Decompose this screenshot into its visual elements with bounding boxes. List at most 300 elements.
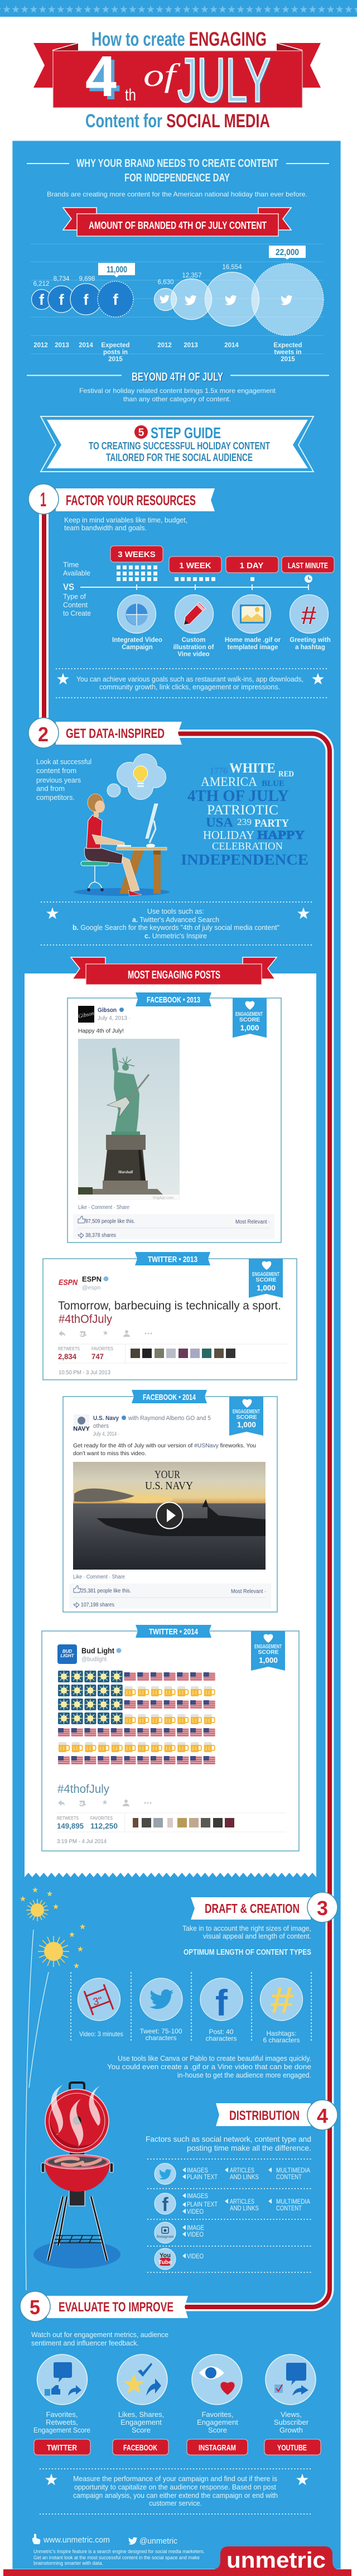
footer red band and unmetric logo: unmetric <box>226 2548 326 2573</box>
tweet stats: 149,895 <box>57 1821 84 1830</box>
title 4th of july lettering: JULY <box>177 45 271 115</box>
badge: engagement score <box>249 1259 283 1298</box>
facebook 2015 expected bubble <box>98 281 133 317</box>
facebook 2012 bubble: f <box>39 291 45 308</box>
step 5 header: 5 <box>30 2296 40 2319</box>
optimal length columns: characters <box>205 2035 237 2042</box>
post card: facebook 2014 us navy: Get ready for the 4th of July with our version of #USNavy fireworks. You <box>73 1442 256 1449</box>
metric column: facebook <box>113 2354 168 2455</box>
button: facebook <box>113 2439 168 2455</box>
5 step guide banner: TO CREATING SUCCESSFUL HOLIDAY CONTENT <box>89 440 270 452</box>
tweet stats: 10:50 PM - 3 Jul 2013 <box>59 1369 110 1376</box>
badge: engagement score: ENGAGEMENT <box>252 1271 279 1278</box>
heading: why your brand: WHY YOUR BRAND NEEDS TO CREATE CONTENT <box>76 157 278 170</box>
word cloud: RED <box>278 770 294 779</box>
twitter bubble chart: 2013 <box>184 342 198 349</box>
tools text: You could even create a .gif or a Vine video that can be done <box>107 2063 311 2071</box>
distribution row: facebook: MULTIMEDIA <box>276 2198 310 2205</box>
metric column: twitter: Retweets, <box>46 2418 78 2426</box>
step 1 header <box>28 484 215 514</box>
distribution row: youtube: You <box>160 2252 171 2259</box>
word cloud: USA <box>206 816 233 829</box>
tweet stats: FAVORITES <box>90 1815 113 1821</box>
button: 3 weeks <box>110 546 163 562</box>
post card: twitter 2013 espn: Tomorrow, barbecuing is technically a sport. <box>58 1299 281 1312</box>
distribution row: instagram: VIDEO <box>187 2230 204 2238</box>
label: facebook 2013: FACEBOOK • 2013 <box>147 995 200 1005</box>
title ribbon <box>33 43 321 108</box>
beyond text <box>79 387 276 403</box>
metric column: youtube: Growth <box>279 2426 303 2434</box>
post card: facebook 2014 us navy: with Raymond Alberto GO and 5 <box>128 1415 211 1422</box>
step 1 tip: community growth, link clicks, engagement or impressions. <box>99 683 280 691</box>
post card: twitter 2014 bud light: #4thofJuly <box>57 1783 109 1796</box>
post card: facebook 2014 us navy <box>63 1390 277 1612</box>
calendar squares: 1 week <box>175 577 215 581</box>
title block <box>33 28 321 132</box>
distribution row: twitter <box>155 2164 310 2185</box>
content type: integrated video campaign: Campaign <box>122 644 153 651</box>
beyond text: than any other category of content. <box>123 395 231 403</box>
axis labels: VS <box>63 582 74 592</box>
beyond text: Festival or holiday related content brings 1.5x more engagement <box>79 387 276 395</box>
distribution row: instagram: Instagram <box>156 2234 174 2239</box>
step 2 header <box>28 718 182 748</box>
tweet stats: 2,834 <box>58 1352 76 1361</box>
distribution row: twitter: MULTIMEDIA <box>276 2166 310 2174</box>
icon: hashtag: # <box>270 1979 294 2021</box>
gibson logo <box>78 1006 95 1023</box>
person <box>84 794 142 896</box>
metric column: youtube: Views, <box>281 2410 302 2419</box>
step 1 intro text: Keep in mind variables like time, budget, <box>64 516 187 524</box>
distribution row: twitter: IMAGES <box>187 2166 208 2174</box>
badge: engagement score: ENGAGEMENT <box>254 1643 282 1650</box>
badge: engagement score: SCORE <box>255 1277 277 1283</box>
distribution row: youtube: VIDEO <box>187 2252 204 2260</box>
tools text <box>107 2055 311 2079</box>
facebook 2013 bubble <box>48 286 75 313</box>
step 4 header <box>216 2100 337 2130</box>
post card: twitter 2014 bud light: @budlight <box>81 1656 107 1663</box>
step 4 text: posting time make all the difference. <box>187 2143 311 2152</box>
content type: gif or image <box>225 595 281 651</box>
step 2 text: and from <box>36 784 65 793</box>
distribution row: facebook: f <box>162 2194 168 2215</box>
optimal length columns: Hashtags: <box>266 2030 297 2037</box>
calendar squares: 3 weeks <box>117 565 157 581</box>
bud light logo: BUD <box>62 1649 72 1654</box>
button: last minute <box>282 557 334 573</box>
content type: custom illustration: Vine video <box>177 651 210 658</box>
button: 1 week <box>169 557 221 573</box>
step 5 text: sentiment and influencer feedback. <box>31 2339 139 2347</box>
step 4 text: Factors such as social network, content type and <box>146 2134 311 2143</box>
ribbon: amount of branded content: AMOUNT OF BRANDED 4TH OF JULY CONTENT <box>89 220 267 231</box>
button: youtube <box>264 2439 321 2455</box>
badge: engagement score: 1,000 <box>240 1024 259 1032</box>
post card: twitter 2013 espn <box>43 1252 297 1380</box>
facebook 2012 bubble <box>31 289 51 309</box>
desk <box>117 847 167 894</box>
facebook stats: 87,509 people like this. <box>85 1219 135 1225</box>
espn logo: ESPN <box>59 1278 78 1287</box>
closing tip: opportunity to capitalize on the audience response. Based on post <box>74 2483 276 2491</box>
step 1 intro text: team bandwidth and goals. <box>64 524 147 532</box>
facebook bubble chart: 6,212 <box>33 281 49 287</box>
step 1 header: FACTOR YOUR RESOURCES <box>66 493 196 509</box>
photo: statue of liberty with guitar: Marshall <box>118 1170 133 1174</box>
post card: twitter 2013 espn: @espn <box>82 1284 101 1291</box>
video: us navy carrier at sunset: U.S. NAVY <box>145 1480 193 1492</box>
icon: film reel <box>126 603 148 626</box>
facebook stats: 38,378 shares <box>85 1232 116 1239</box>
content type: greeting with hashtag: a hashtag <box>295 644 325 651</box>
tools text: Use tools like Canva or Pablo to create beautiful images quickly. <box>118 2055 311 2062</box>
label expected tweets: tweets in <box>274 349 302 356</box>
icon: pencil <box>184 602 205 625</box>
smoke <box>51 2085 100 2148</box>
axis labels: Available <box>63 569 90 577</box>
distribution row: facebook: ARTICLES <box>230 2198 254 2205</box>
icon: speech bubble, check and share <box>274 2363 308 2396</box>
video: us navy carrier at sunset: YOUR <box>155 1469 181 1481</box>
footer description: Unmetric's Inspire feature is a search engine designed for social media marketers. <box>33 2549 205 2555</box>
word cloud: WHITE <box>229 761 276 776</box>
photo: statue of liberty with guitar: ImgApr.com <box>153 1196 174 1200</box>
button: instagram <box>187 2439 248 2455</box>
5 step guide banner: 5 <box>138 427 144 439</box>
closing tip: customer service. <box>149 2499 202 2507</box>
button: facebook: FACEBOOK <box>123 2443 157 2453</box>
label: twitter 2014 <box>136 1625 211 1638</box>
video: us navy carrier at sunset <box>73 1462 266 1570</box>
word cloud: CELEBRATION <box>212 841 283 852</box>
footer links: @unmetric <box>139 2536 177 2546</box>
post card: twitter 2013 espn: #4thOfJuly <box>59 1313 112 1326</box>
word cloud: PATRIOTIC <box>207 803 278 818</box>
tweet action icons <box>59 1330 152 1337</box>
distribution row: facebook: IMAGES <box>187 2192 208 2200</box>
optimal length columns: Tweet: 75-100 <box>139 2027 182 2035</box>
facebook stats <box>69 1584 271 1609</box>
step 4 text <box>146 2134 311 2152</box>
button: instagram: INSTAGRAM <box>199 2443 236 2453</box>
axis labels: Type of <box>63 592 86 601</box>
word cloud: HOLIDAY <box>203 828 254 842</box>
twitter 2014 bubble <box>205 272 259 326</box>
metric column: instagram: Favorites, <box>201 2410 234 2419</box>
navy logo: NAVY <box>73 1426 90 1432</box>
button: twitter <box>34 2439 90 2455</box>
content type: integrated video campaign: Integrated Video <box>112 637 162 644</box>
step 2 text <box>36 757 91 802</box>
content type: custom illustration <box>173 595 214 658</box>
grill legs <box>48 2196 107 2261</box>
icon: picture <box>240 605 265 623</box>
post card: facebook 2014 us navy: don't want to miss this video. <box>73 1450 146 1457</box>
facebook 2014 bubble <box>70 284 102 315</box>
content type: custom illustration: illustration of <box>173 644 214 651</box>
step 4 header: DISTRIBUTION <box>229 2108 300 2123</box>
post card: facebook 2013 gibson <box>67 992 281 1243</box>
step 2 header: 2 <box>38 723 49 746</box>
calendar square: 1 day <box>250 577 254 581</box>
facebook stats <box>73 1214 274 1239</box>
distribution row: youtube <box>155 2248 204 2270</box>
monitor <box>117 804 158 847</box>
step 1 tip: You can achieve various goals such as restaurant walk-ins, app downloads, <box>76 675 303 683</box>
title 4th of july lettering: 4 <box>85 44 117 108</box>
tweet stats: 112,250 <box>90 1821 118 1830</box>
twitter bubble chart: 16,554 <box>222 264 242 271</box>
closing tip: Measure the performance of your campaign and find out if there is <box>73 2474 277 2483</box>
icon: hashtag <box>260 1978 302 2021</box>
axis labels <box>63 560 91 617</box>
badge: engagement score: SCORE <box>236 1414 257 1421</box>
grill bowl <box>41 2152 113 2191</box>
tools tip: c. Unmetric's Inspire <box>144 932 207 940</box>
step 1 tip <box>56 669 327 698</box>
step 5 text <box>31 2330 168 2347</box>
title 4th of july lettering: of <box>143 57 181 93</box>
button: 1 week: 1 WEEK <box>179 561 211 570</box>
step 3 text <box>182 1925 311 1957</box>
distribution row: facebook <box>155 2192 310 2215</box>
icon: check, star and share <box>123 2363 161 2396</box>
facebook bubble chart: 2012 <box>33 342 48 349</box>
step 2 text: Look at successful <box>36 757 91 766</box>
optimal length columns: Video: 3 minutes <box>79 2030 123 2038</box>
step 4 header: 4 <box>317 2104 328 2127</box>
content type: integrated video campaign <box>112 595 162 651</box>
badge: engagement score: SCORE <box>239 1016 260 1023</box>
label: facebook 2014 <box>132 1390 207 1403</box>
optimal length columns: characters <box>145 2034 177 2042</box>
facebook 2014 bubble: f <box>84 291 89 308</box>
content type: custom illustration: Custom <box>182 637 205 644</box>
facebook stats: Most Relevant · <box>231 1589 266 1595</box>
title line: how to create engaging: How to create ENGAGING <box>91 28 267 50</box>
heading: beyond 4th of july: BEYOND 4TH OF JULY <box>132 371 224 384</box>
twitter bubble chart: 6,630 <box>158 279 173 286</box>
button: last minute: LAST MINUTE <box>288 561 328 570</box>
tweet stats: RETWEETS <box>58 1346 80 1351</box>
metric column: facebook: Likes, Shares, <box>118 2410 164 2419</box>
footer red band and unmetric logo <box>3 2546 351 2576</box>
icon: speech bubble, thumb and share <box>45 2362 81 2396</box>
content type: greeting with hashtag: Greeting with <box>290 637 331 644</box>
step 2 header: GET DATA-INSPIRED <box>66 726 165 741</box>
step 5 header <box>20 2291 188 2321</box>
button: youtube: YOUTUBE <box>277 2443 307 2453</box>
content type: gif or image: Home made .gif or <box>225 637 281 644</box>
word cloud <box>181 761 308 868</box>
distribution row: twitter: ARTICLES <box>230 2166 254 2174</box>
label: twitter 2013 <box>135 1252 210 1265</box>
icon: facebook <box>200 1978 243 2023</box>
facebook bubble chart: 2013 <box>55 342 69 349</box>
metric column: youtube: Subscriber <box>274 2418 309 2426</box>
facebook bubble chart: 9,698 <box>79 276 95 282</box>
content type: greeting with hashtag <box>290 595 331 651</box>
heading: beyond 4th of july <box>27 371 329 384</box>
ribbon: most engaging posts <box>71 957 277 985</box>
top star band <box>0 0 357 17</box>
tools tip <box>41 902 312 945</box>
footer description: Get an instant look at the most successful content in the social space and make <box>33 2555 200 2561</box>
step 2 text: previous years <box>36 776 81 784</box>
facebook 2013 bubble: f <box>59 291 65 308</box>
metric column: twitter: Engagement Score <box>33 2426 90 2434</box>
title 4th of july lettering <box>85 44 272 116</box>
metric column: instagram <box>187 2354 248 2455</box>
word cloud: 4TH OF JULY <box>187 788 289 805</box>
metric column: twitter: Favorites, <box>46 2410 78 2419</box>
tweet stats <box>57 1813 286 1845</box>
icon: pointing hand <box>32 2534 40 2544</box>
ribbon: amount of branded content <box>63 208 291 236</box>
closing tip <box>40 2469 311 2514</box>
label expected posts: posts in <box>103 349 128 356</box>
callout 11,000: 11,000 <box>107 265 127 275</box>
icon: video clapper <box>78 1978 120 2021</box>
icon: clock <box>305 575 312 583</box>
twitter 2015 expected bubble <box>252 263 324 335</box>
chart grid lines <box>31 244 324 354</box>
badge: engagement score <box>233 998 267 1038</box>
illustration: person at desk with idea <box>74 754 170 896</box>
word cloud: HAPPY <box>257 828 305 842</box>
content type: gif or image: templated image <box>228 644 278 651</box>
button: twitter: TWITTER <box>47 2443 77 2453</box>
label expected tweets: 2015 <box>281 356 295 363</box>
optimal length columns <box>71 1972 311 2044</box>
post card: twitter 2014 bud light <box>42 1625 299 1851</box>
tweet stats: RETWEETS <box>57 1815 79 1821</box>
tweet stats <box>58 1344 287 1376</box>
label: twitter 2014: TWITTER • 2014 <box>149 1627 199 1637</box>
closing tip: campaign analysis, you can either extend the campaign or end with <box>73 2491 278 2500</box>
optimal length columns: Post: 40 <box>209 2028 234 2036</box>
stripe from step 1 to step 2 <box>39 514 49 718</box>
label expected posts: 2015 <box>108 356 123 363</box>
metric column: facebook: Engagement <box>120 2418 162 2426</box>
thought cloud <box>107 754 166 799</box>
5 step guide banner: TAILORED FOR THE SOCIAL AUDIENCE <box>106 452 253 464</box>
icon: light bulb <box>133 766 148 787</box>
badge: engagement score: 1,000 <box>237 1421 256 1429</box>
stripe from step 2 to step 5 <box>178 733 330 2307</box>
label: twitter 2013: TWITTER • 2013 <box>148 1255 197 1264</box>
grill lid <box>45 2083 109 2153</box>
navy logo <box>73 1414 90 1432</box>
sparkler fireworks <box>20 1887 85 2290</box>
post card: twitter 2013 espn: ESPN <box>82 1275 102 1283</box>
video play button <box>156 1503 183 1528</box>
tools tip: b. Google Search for the keywords "4th of july social media content" <box>73 924 279 932</box>
stool <box>81 861 109 891</box>
post card: facebook 2014 us navy: July 4, 2014 · <box>93 1431 119 1437</box>
white card: most engaging posts <box>25 973 316 1877</box>
distribution row: twitter: AND LINKS <box>230 2173 259 2181</box>
heading: why your brand <box>27 157 329 184</box>
callout 22,000: 22,000 <box>276 248 299 257</box>
badge: engagement score <box>251 1631 285 1671</box>
post card: facebook 2014 us navy: others <box>93 1423 109 1429</box>
label: facebook 2014: FACEBOOK • 2014 <box>143 1393 196 1402</box>
post card: facebook 2013 gibson: July 4, 2013 · <box>98 1015 131 1021</box>
distribution row: twitter: CONTENT <box>276 2173 302 2181</box>
icon: twitter bird <box>128 2537 137 2545</box>
ribbon: most engaging posts: MOST ENGAGING POSTS <box>128 969 220 981</box>
step 2 text: competitors. <box>36 793 75 802</box>
step 1 intro text <box>64 516 187 532</box>
timeline axis <box>80 584 308 590</box>
emoji flag grid <box>58 1671 215 1764</box>
callout 22,000 <box>269 246 306 260</box>
icon: hash: # <box>301 601 317 630</box>
label: facebook 2013 <box>136 992 211 1006</box>
post card: twitter 2014 bud light: Bud Light <box>81 1646 114 1655</box>
footer description: brainstorming smarter with data. <box>33 2560 103 2567</box>
badge: engagement score <box>229 1397 263 1436</box>
gibson logo: Gibson <box>78 1010 95 1020</box>
badge: engagement score: SCORE <box>258 1649 279 1656</box>
post card: facebook 2014 us navy: U.S. Navy <box>93 1415 119 1422</box>
distribution row: facebook: VIDEO <box>187 2208 204 2215</box>
distribution row: facebook: PLAIN TEXT <box>187 2200 218 2208</box>
button: 3 weeks: 3 WEEKS <box>118 550 156 559</box>
optimal length columns: 6 characters <box>263 2036 300 2044</box>
facebook bubble chart <box>31 263 135 363</box>
footer links <box>32 2534 177 2546</box>
twitter bubble chart: 12,357 <box>182 272 202 279</box>
facebook stats: 107,198 shares <box>81 1602 114 1608</box>
metric column: twitter <box>33 2354 90 2455</box>
badge: engagement score: ENGAGEMENT <box>233 1408 260 1415</box>
word cloud: 239 <box>237 817 252 827</box>
step 3 header: DRAFT & CREATION <box>205 1901 300 1916</box>
distribution row: facebook: CONTENT <box>276 2204 302 2212</box>
5 step guide banner: STEP GUIDE <box>151 424 221 442</box>
step 3 header <box>191 1892 337 1922</box>
distribution row: twitter: PLAIN TEXT <box>187 2173 218 2181</box>
footer links: www.unmetric.com <box>43 2535 110 2545</box>
tools tip: Use tools such as: <box>147 908 204 915</box>
step 1 header: 1 <box>40 489 46 511</box>
post card: facebook 2014 us navy: Like · Comment · Share <box>73 1574 125 1580</box>
button: 1 day <box>226 557 278 573</box>
axis labels: to Create <box>63 609 91 617</box>
step 2 text: content from <box>36 766 76 775</box>
icon: twitter <box>140 1978 182 2021</box>
distribution row: instagram: IMAGE <box>187 2224 204 2232</box>
distribution table dividers <box>147 2159 312 2272</box>
5 step guide banner <box>41 416 313 472</box>
badge: engagement score: ENGAGEMENT <box>235 1011 263 1018</box>
facebook stats: Most Relevant · <box>235 1219 270 1225</box>
axis labels: Content <box>63 601 88 609</box>
twitter bubble chart <box>154 246 324 363</box>
title line: content for social media: Content for SOCIAL MEDIA <box>85 111 270 132</box>
word cloud: 1776 <box>210 766 228 776</box>
heading: beyond 4th of july: BEYOND 4TH OF JULY <box>132 371 223 383</box>
facebook stats: 25,381 people like this. <box>81 1588 131 1594</box>
button: 1 day: 1 DAY <box>240 561 263 570</box>
metric column: instagram: Score <box>208 2426 227 2434</box>
distribution row: instagram <box>155 2222 204 2243</box>
